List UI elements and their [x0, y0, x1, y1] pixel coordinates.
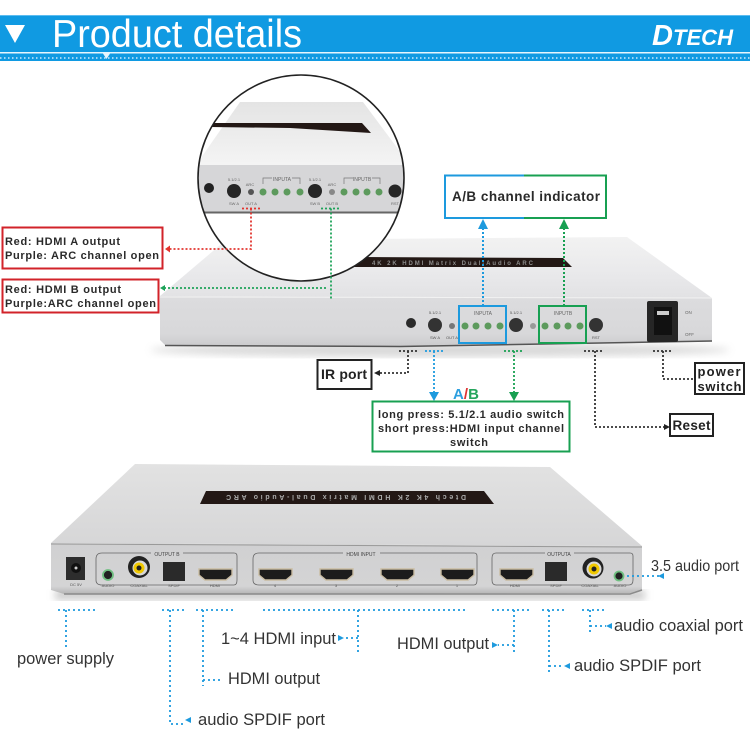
callout: magnified panel: INPUTA [273, 177, 292, 183]
arrow: SW B leader [504, 351, 524, 401]
port: SPDIF A [545, 562, 567, 581]
callout: HDMI B output: Red: HDMI B output [5, 284, 121, 296]
button: SW A [428, 318, 442, 332]
IR sensor [406, 318, 416, 328]
top device photo: 5.1/2.1 [510, 310, 523, 315]
callout: magnified panel: OUT B [326, 201, 338, 206]
callout: power switch: switch [698, 379, 742, 394]
callout: magnified panel: SW B [310, 201, 320, 206]
panel: HDMI input: 4 [274, 583, 277, 588]
callout: power switch: power [698, 364, 740, 379]
port: HDMI B [199, 569, 232, 580]
port: DC power [66, 557, 85, 587]
indicator: ARC A [449, 323, 455, 329]
label: audio SPDIF port B: audio SPDIF port [198, 711, 325, 729]
callout: magnified panel [198, 102, 404, 280]
arrow: power switch leader [653, 351, 695, 379]
bottom device photo [51, 464, 645, 600]
callout: magnified panel: SW A [229, 201, 239, 206]
port: audio A [614, 572, 624, 580]
callout: long and short press: switch [450, 437, 488, 449]
port: audio B [103, 570, 113, 580]
callout: IR port [318, 360, 372, 389]
arrow: green leader [160, 208, 341, 299]
port: DC power: DC 5V [70, 582, 82, 587]
panel: output B: COAXIAL [130, 583, 148, 588]
port: coaxial B [128, 556, 150, 578]
LEDs input B [542, 322, 584, 330]
callout: HDMI B output [2, 280, 158, 312]
panel: output A: AUDIO [614, 583, 626, 588]
rear label strip: Dtech 4K 2K HDMI Matrix Dual-Audio ARC [226, 493, 466, 500]
label: power supply [17, 610, 115, 668]
callout: IR port: IR port [321, 366, 367, 382]
power rocker switch [647, 301, 694, 342]
label: HDMI input: 1~4 HDMI input [221, 630, 336, 648]
arrow: IR port leader [374, 351, 419, 376]
magnifier ring [198, 75, 404, 281]
callout: magnified panel: 5.1/2.1 [309, 177, 322, 182]
port: coaxial A [582, 558, 604, 578]
callout: magnified panel: ARC [246, 182, 254, 187]
label: HDMI output B [196, 610, 320, 688]
label: 3.5 audio port: 3.5 audio port [651, 558, 740, 575]
panel: output B: AUDIO [102, 583, 114, 588]
label: 3.5 audio port [627, 558, 740, 579]
logo: DTECH [652, 20, 734, 52]
callout: reset [670, 414, 713, 436]
device label strip [350, 257, 572, 267]
top device photo [150, 237, 730, 357]
port: HDMI A [500, 569, 533, 580]
button: SW B [509, 318, 523, 332]
port: SPDIF B [163, 562, 185, 581]
panel: output A: SPDIF [550, 583, 562, 588]
title: Product details [52, 13, 302, 56]
icon: header triangle [5, 25, 25, 43]
indicator: ARC B [530, 323, 536, 329]
panel: output B [96, 552, 237, 588]
panel: output A: HDMI [510, 583, 520, 588]
callout: magnified panel: 5.1/2.1 [228, 177, 241, 182]
panel: output B: HDMI [210, 583, 220, 588]
panel: HDMI input: HDMI INPUT [346, 552, 376, 558]
callout: HDMI A output: Purple: ARC channel open [5, 250, 159, 262]
panel: HDMI input [253, 552, 477, 588]
arrow: green indicator [559, 219, 569, 305]
magnified strip [208, 123, 371, 133]
callout: long and short press: long press: 5.1/2.1 audio switch [378, 409, 564, 421]
panel: output B: OUTPUT B [154, 552, 180, 558]
panel: output A [492, 552, 633, 588]
callout: magnified panel: INPUTB [353, 177, 372, 183]
blue highlight box [459, 306, 506, 343]
rear label strip [200, 491, 494, 504]
text: input A: INPUTA [474, 311, 493, 317]
label: HDMI output B: HDMI output [228, 670, 320, 688]
header banner [0, 13, 750, 61]
label: audio coaxial port: audio coaxial port [614, 617, 743, 635]
label: HDMI output A [397, 610, 530, 653]
callout: A/B channel indicator: A/B channel indicator [452, 189, 601, 204]
panel: HDMI input: 3 [335, 583, 338, 588]
arrow: blue indicator [478, 219, 488, 305]
power rocker switch: OFF [685, 332, 694, 337]
label: HDMI input [221, 610, 467, 652]
callout: HDMI A output [2, 228, 162, 268]
top device photo: OUT A [446, 335, 458, 340]
label: audio SPDIF port A: audio SPDIF port [574, 657, 701, 675]
power rocker switch: ON [685, 310, 692, 315]
callout: magnified panel: ARC [328, 182, 336, 187]
top device photo: 5.1/2.1 [429, 310, 442, 315]
callout: reset: Reset [672, 418, 711, 433]
text: input B: INPUTB [554, 311, 573, 317]
A/B heading: A/B [453, 386, 479, 403]
label: audio SPDIF port A [542, 610, 701, 675]
callout: A/B channel indicator [445, 176, 606, 218]
label: audio coaxial port [582, 610, 743, 635]
button: reset [589, 318, 603, 332]
ports: HDMI 4 to 1 [259, 569, 474, 580]
callout: HDMI A output: Red: HDMI A output [5, 236, 120, 248]
callout: long and short press: short press:HDMI input channel [378, 423, 564, 435]
callout: HDMI B output: Purple:ARC channel open [5, 298, 156, 310]
label: HDMI output A: HDMI output [397, 635, 489, 653]
label: power supply: power supply [17, 650, 115, 668]
panel: output B: SPDIF [168, 583, 180, 588]
top device photo: SW A [430, 335, 440, 340]
green highlight box [539, 306, 586, 343]
callout: magnified panel: OUT A [245, 201, 257, 206]
device label strip: 4K 2K HDMI Matrix Dual-Audio ARC [372, 261, 534, 267]
panel: HDMI input: 2 [396, 583, 399, 588]
panel: HDMI input: 1 [456, 583, 459, 588]
arrow: reset leader [584, 351, 670, 430]
LEDs input A [462, 322, 504, 330]
callout: long and short press [372, 402, 570, 452]
arrow: red leader [165, 208, 262, 252]
callout: magnified panel: RST [391, 201, 400, 206]
callout: power switch [695, 363, 744, 394]
panel: output A: OUTPUTA [547, 552, 571, 558]
arrow: SW A leader [425, 351, 445, 401]
label: audio SPDIF port B [162, 610, 325, 729]
panel: output A: COAXIAL [581, 583, 599, 588]
top device photo: RST [592, 335, 601, 340]
